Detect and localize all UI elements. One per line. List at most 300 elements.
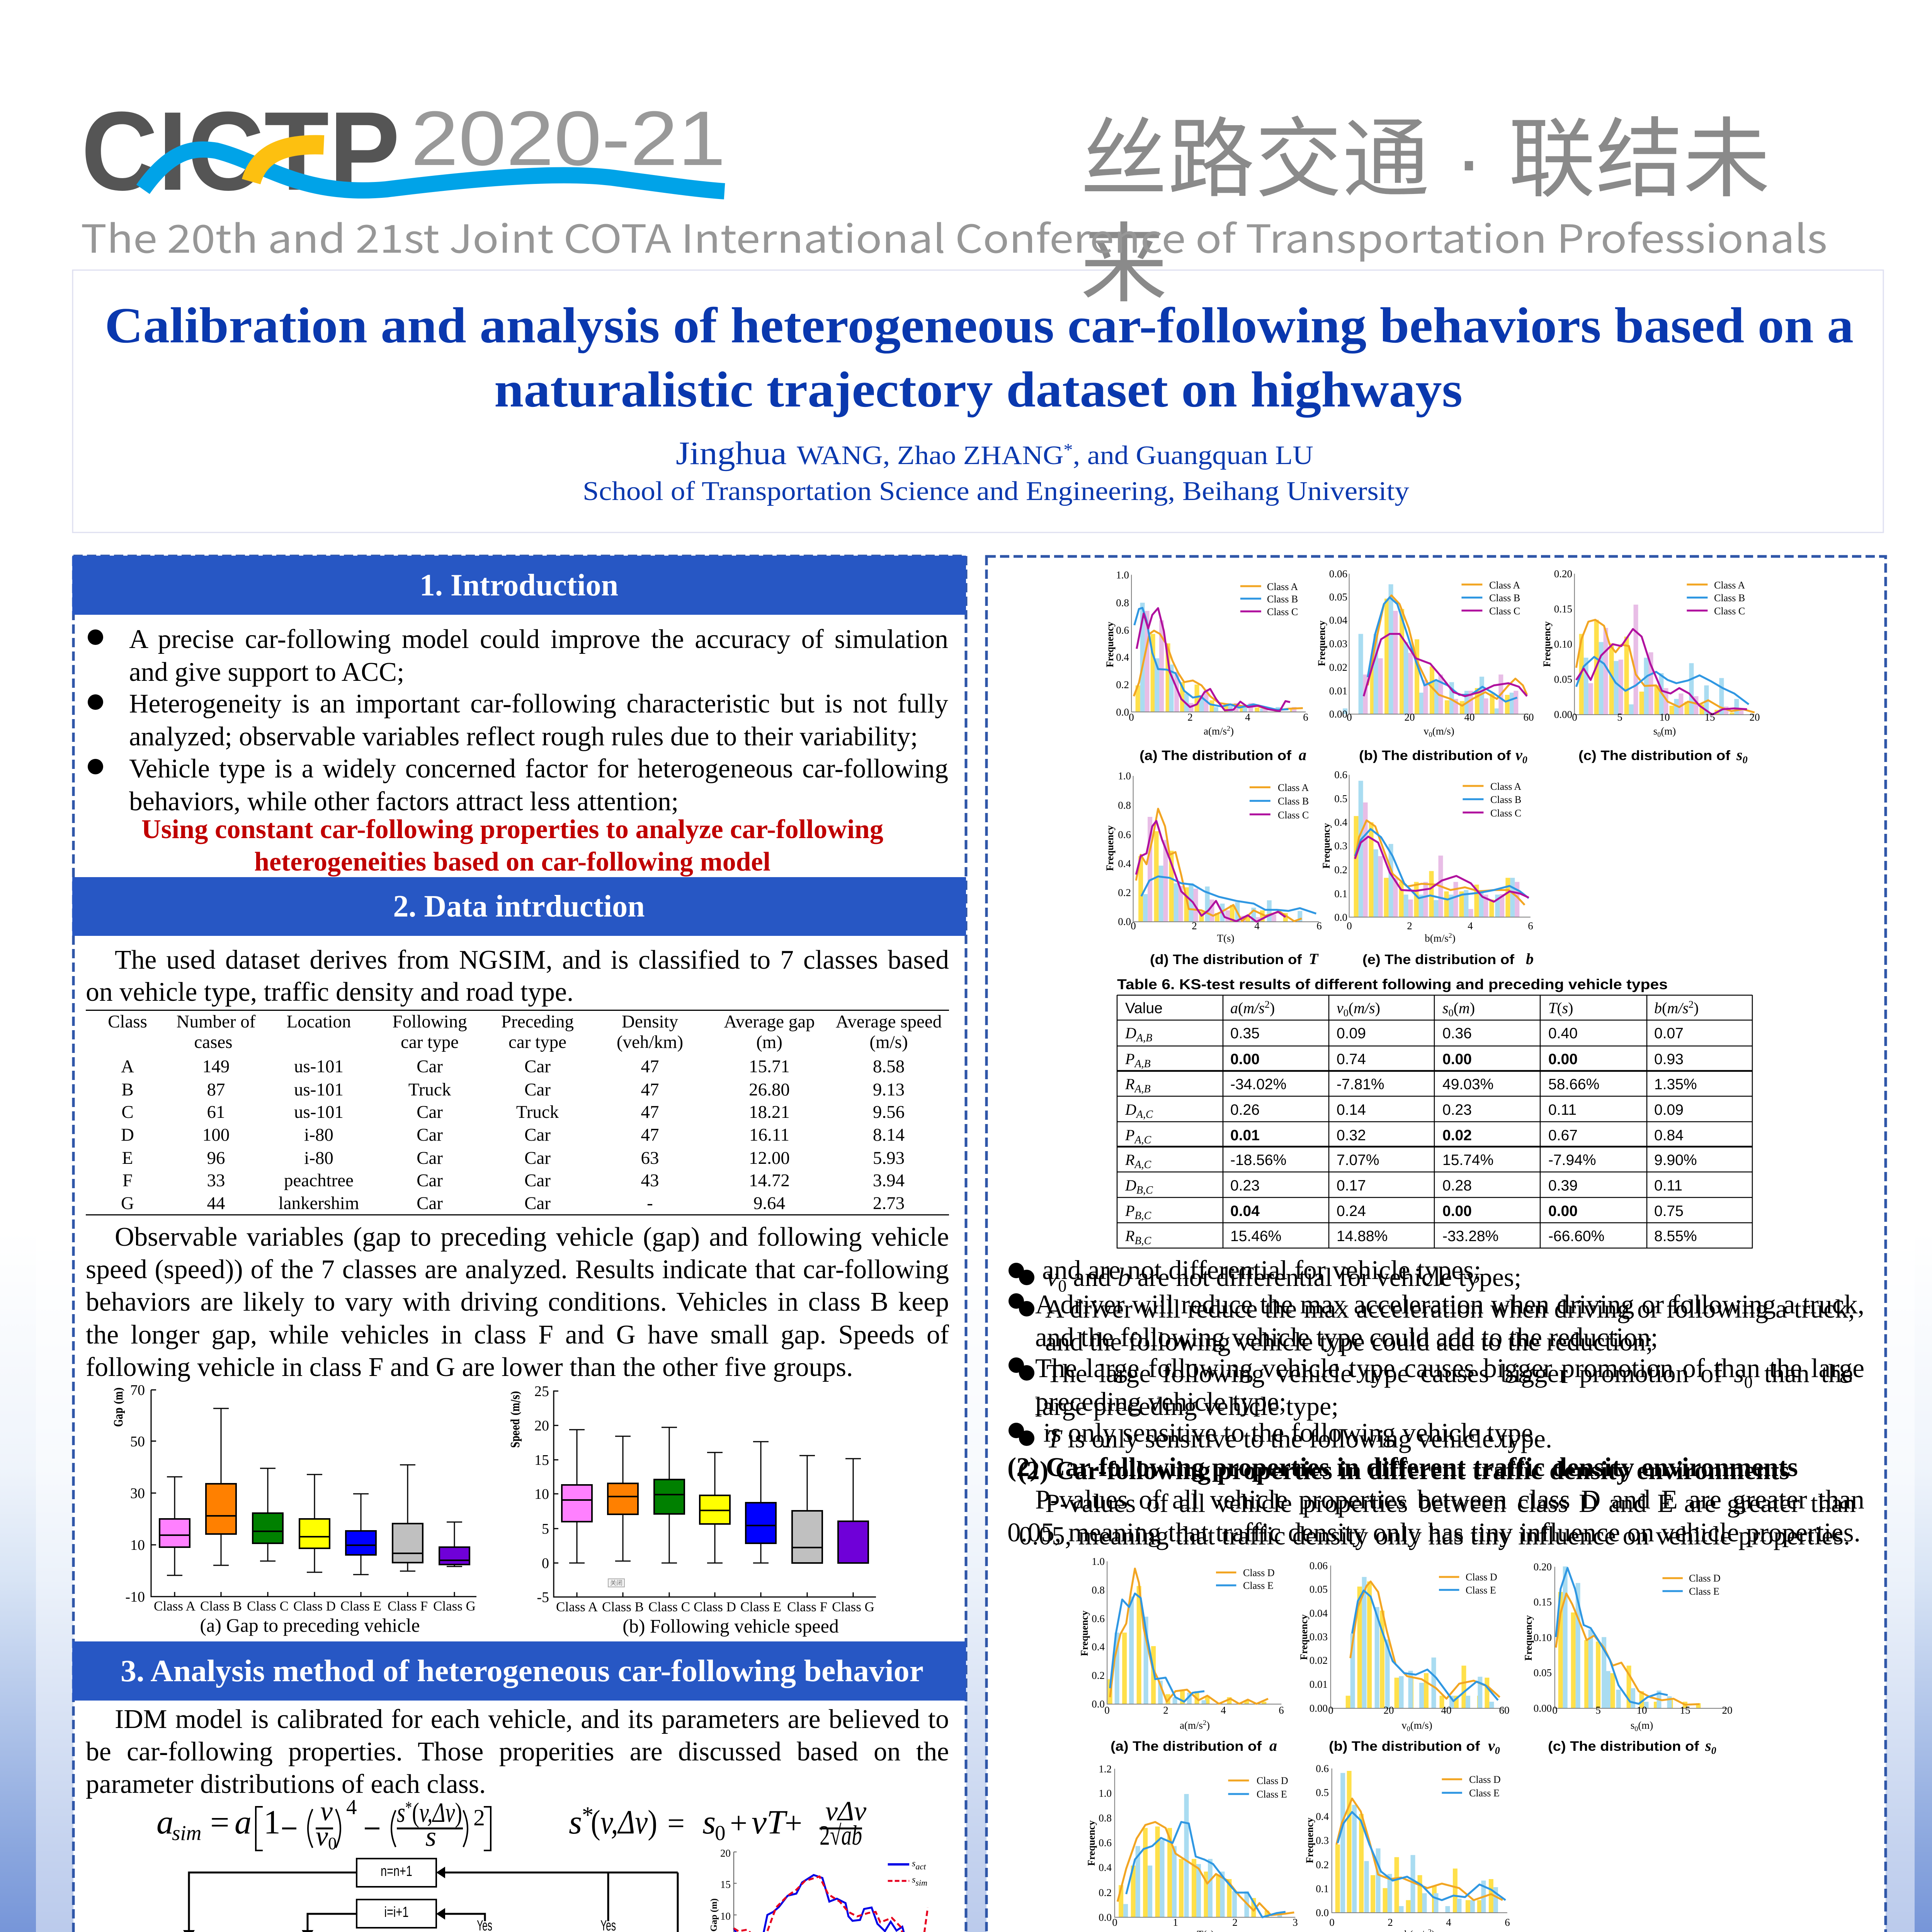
table: KS-test results: 0.17 (1337, 1177, 1366, 1194)
table: dataset classes: cases (194, 1032, 233, 1052)
text block: findings (2), doubled layers: and the following vehicle type could add to the reduction; (1035, 1323, 1658, 1352)
chart: density distribution T (classes D E): 1 (1173, 1917, 1178, 1928)
chart: density distribution v0 (classes D E): 60 (1499, 1704, 1509, 1716)
chart: density distribution s0 (classes D E): 0.20 (1534, 1561, 1552, 1573)
table: KS-test results: Value (1125, 1000, 1163, 1017)
chart: KS distribution b (classes A B C): 2 (1449, 932, 1452, 939)
chart: KS distribution v0 (classes A B C): 0.05 (1329, 591, 1347, 603)
table: dataset classes: 26.80 (749, 1080, 790, 1100)
table: KS-test results: 0.93 (1654, 1051, 1684, 1068)
chart: KS distribution b (classes A B C): 0.4 (1334, 816, 1348, 828)
chart: KS distribution b (classes A B C) (1321, 769, 1534, 968)
chart: gap box plot: Class F (388, 1599, 428, 1614)
chart: density distribution a (classes D E): 2 (1163, 1704, 1168, 1716)
chart: density distribution v0 (classes D E): v (1488, 1737, 1495, 1754)
equation: desired gap: vΔv (825, 1796, 866, 1827)
chart: KS distribution b (classes A B C): b(m/s (1425, 932, 1449, 944)
chart: KS distribution a (classes A B C): 2 (1227, 724, 1230, 732)
chart: density distribution b (classes D E): 2 (1388, 1917, 1393, 1928)
text block: findings (2), doubled layers: The large following vehicle type causes bigger promotion of s0 than the (1046, 1359, 1853, 1392)
equation: desired gap: = (667, 1806, 685, 1840)
table: dataset classes: 87 (207, 1080, 225, 1100)
chart: density distribution b (classes D E): 0.0 (1316, 1907, 1329, 1918)
table: KS-test results: 8.55% (1654, 1228, 1697, 1245)
chart: density distribution a (classes D E): 0.2 (1092, 1670, 1105, 1681)
table: dataset classes: 47 (641, 1080, 659, 1100)
chart: density distribution s0 (classes D E): 20 (1722, 1704, 1733, 1716)
chart: density distribution b (classes D E): 4 (1446, 1917, 1451, 1928)
chart: density distribution T (classes D E): Class E (1257, 1789, 1287, 1800)
chart: density distribution b (classes D E): Class D (1469, 1774, 1501, 1785)
table: dataset classes: Car (417, 1125, 443, 1145)
chart: density distribution b (classes D E): 0.4 (1316, 1811, 1329, 1822)
table: dataset classes: 9.56 (873, 1102, 905, 1122)
chart: density distribution a (classes D E): Class E (1243, 1580, 1274, 1591)
table: KS-test results: 0 (1344, 1007, 1349, 1019)
table: dataset classes: Car (524, 1193, 551, 1213)
text block: observable variables: the longer gap, while vehicles in class F and G have small gap. Speeds of (86, 1320, 949, 1350)
chart: density distribution s0 (classes D E): s (1631, 1719, 1634, 1731)
chart: speed box plot: Class D (694, 1599, 736, 1614)
equation: desired gap: 2√ab (820, 1820, 862, 1851)
table: dataset classes: 47 (641, 1056, 659, 1077)
table: dataset classes: C (121, 1102, 134, 1122)
chart: gap box plot: (a) Gap to preceding vehicle (200, 1614, 420, 1636)
table: dataset classes: 8.14 (873, 1125, 905, 1145)
table: dataset classes: 61 (207, 1102, 225, 1122)
chart: simulated gap trajectory: s (912, 1875, 915, 1885)
table: KS-test results: B,C (1134, 1210, 1151, 1222)
chart: speed box plot: 25 (534, 1383, 549, 1400)
authors (676, 435, 1313, 471)
table: KS-test results (1117, 976, 1752, 1248)
chart: density distribution T (classes D E): 1.2 (1099, 1763, 1112, 1775)
chart: KS distribution a (classes A B C): 0.6 (1116, 624, 1129, 636)
chart: density distribution v0 (classes D E): 0 (1407, 1725, 1410, 1733)
chart: KS distribution v0 (classes A B C): Class C (1489, 605, 1520, 617)
chart: density distribution s0 (classes D E): 0 (1552, 1704, 1558, 1716)
table: KS-test results: 0.14 (1337, 1102, 1366, 1118)
chart: density distribution a (classes D E): Frequency (1079, 1611, 1090, 1656)
table: dataset classes: Car (524, 1148, 551, 1168)
chart: density distribution s0 (classes D E): 0.10 (1534, 1632, 1552, 1643)
chart: KS distribution a (classes A B C): Class B (1267, 594, 1298, 605)
chart: density distribution s0 (classes D E): 0.15 (1534, 1596, 1552, 1608)
chart: gap box plot: Class B (200, 1599, 242, 1614)
chart: KS distribution T (classes A B C): Class B (1278, 796, 1309, 807)
title: Calibration and analysis of heterogeneous car-following behaviors based on a (105, 298, 1854, 354)
table: KS-test results: 0.11 (1654, 1177, 1682, 1194)
equation: IDM acceleration: s (397, 1797, 408, 1828)
chart: density distribution a (classes D E): 0 (1104, 1704, 1110, 1716)
chart: density distribution b (classes D E): Frequency (1304, 1818, 1315, 1863)
table: KS-test results: 0.24 (1337, 1203, 1366, 1219)
chart: speed box plot: 10 (534, 1486, 549, 1502)
chart: KS distribution v0 (classes A B C): Frequency (1316, 621, 1327, 666)
flowchart: analysis process: i=i+1 (384, 1904, 409, 1920)
authors: , and Guangquan LU (1073, 440, 1313, 470)
table: KS-test results: 58.66% (1548, 1076, 1599, 1093)
chart: KS distribution s0 (classes A B C): 0 (1657, 731, 1661, 738)
equation: IDM acceleration: a (235, 1804, 252, 1841)
table: dataset classes: D (121, 1125, 134, 1145)
chart: KS distribution a (classes A B C): Frequency (1104, 622, 1116, 667)
chart: KS distribution b (classes A B C): Frequency (1321, 823, 1332, 869)
chart: speed box plot: -5 (537, 1589, 549, 1605)
table: KS-test results: R (1125, 1075, 1134, 1093)
chart: density distribution s0 (classes D E): 15 (1680, 1704, 1690, 1716)
table: dataset classes: Location (286, 1012, 351, 1032)
table: dataset classes: Truck (516, 1102, 559, 1122)
chart: density distribution v0 (classes D E): 0.02 (1310, 1655, 1328, 1666)
table: dataset classes: Following (392, 1012, 467, 1032)
text block: introduction: Heterogeneity is an important car-following characteristic but is not fully (129, 689, 948, 719)
table: KS-test results: A,B (1136, 1032, 1152, 1044)
heading: conference slogan (1080, 111, 1770, 313)
chart: KS distribution T (classes A B C): Frequency (1104, 825, 1116, 871)
chart: density distribution v0 (classes D E): Class E (1466, 1585, 1496, 1596)
table: KS-test results: A,C (1134, 1159, 1151, 1171)
chart: density distribution s0 (classes D E): (c) The distribution of (1548, 1739, 1699, 1754)
chart: density distribution v0 (classes D E): 0.06 (1310, 1560, 1328, 1571)
chart: density distribution s0 (classes D E): s (1705, 1737, 1711, 1754)
chart: speed box plot: Class C (648, 1599, 690, 1614)
text block: observable variables (86, 1224, 949, 1384)
chart: density distribution T (classes D E): 0.8 (1099, 1812, 1112, 1824)
chart: density distribution v0 (classes D E): 0 (1328, 1704, 1333, 1716)
chart: KS distribution s0 (classes A B C): Class C (1714, 605, 1745, 617)
text block: method description: parameter distributions of each class. (86, 1769, 486, 1799)
chart: KS distribution s0 (classes A B C): 0.10 (1554, 638, 1572, 650)
chart: density distribution v0 (classes D E): v (1401, 1719, 1407, 1731)
table: dataset classes: 16.11 (749, 1125, 789, 1145)
equation: desired gap: vT (752, 1804, 788, 1841)
chart: KS distribution v0 (classes A B C): Class B (1489, 592, 1520, 604)
title: naturalistic trajectory dataset on highways (494, 362, 1463, 418)
table: KS-test results: 0.00 (1230, 1051, 1260, 1068)
chart: density distribution a (classes D E): a(m/s (1180, 1719, 1203, 1731)
text block: findings (2), doubled layers: T is only sensitive to the following vehicle type. (1046, 1424, 1552, 1453)
table: KS-test results: 15.46% (1230, 1228, 1281, 1245)
chart: KS distribution v0 (classes A B C): 0.06 (1329, 568, 1347, 580)
table: dataset classes: us-101 (294, 1102, 344, 1122)
text block: findings (2), doubled layers: (2) Car-following properties in different traffic density environments (1018, 1456, 1789, 1485)
text block: findings (2), doubled layers: and the following vehicle type could add to the reduction; (1045, 1327, 1653, 1356)
equation: IDM acceleration (156, 1795, 491, 1853)
flowchart connectors (138, 1872, 678, 1932)
chart: KS distribution a (classes A B C): 0 (1129, 711, 1134, 723)
chart: density distribution a (classes D E): (a) The distribution of (1111, 1739, 1262, 1754)
chart: density distribution v0 (classes D E): 0.03 (1310, 1631, 1328, 1643)
table: dataset classes: 9.13 (873, 1080, 905, 1100)
chart: KS distribution T (classes A B C): Class C (1278, 810, 1309, 821)
table: KS-test results: 0.07 (1654, 1025, 1684, 1042)
table: KS-test results: m/s) (1354, 999, 1380, 1017)
icon: intro bullets (88, 629, 103, 774)
table: dataset classes: 96 (207, 1148, 225, 1168)
table: dataset classes: Car (417, 1148, 443, 1168)
equation: desired gap: s (569, 1804, 582, 1841)
chart: density distribution T (classes D E): 0.2 (1099, 1887, 1112, 1898)
table: KS-test results: 0.67 (1548, 1127, 1578, 1144)
text block: findings (2), doubled layers: P-values of all vehicle properties between class D and E are greater than (1045, 1488, 1856, 1518)
equation: desired gap (569, 1796, 866, 1851)
chart: KS distribution v0 (classes A B C): 60 (1523, 711, 1534, 723)
chart: density distribution v0 (classes D E): 0.01 (1310, 1679, 1328, 1690)
background gradient (0, 1231, 1932, 1932)
table: dataset classes: 149 (202, 1056, 230, 1077)
chart: KS distribution s0 (classes A B C): (c) The distribution of (1578, 748, 1730, 763)
table: KS-test results: 0.09 (1654, 1102, 1684, 1118)
table: KS-test results: 15.74% (1442, 1152, 1493, 1168)
table: dataset classes: 63 (641, 1148, 659, 1168)
chart: KS distribution T (classes A B C): 4 (1254, 920, 1260, 932)
text block: findings (2), doubled layers: A driver will reduce the max acceleration when driving or following a truck, (1035, 1290, 1864, 1320)
chart: KS distribution s0 (classes A B C): (m) (1661, 725, 1676, 737)
chart: gap box plot: 10 (130, 1537, 145, 1553)
table: KS-test results: -18.56% (1230, 1152, 1286, 1168)
text block: observable variables: speed (speed)) of the 7 classes are analyzed. Results indicate that car-following (86, 1255, 949, 1284)
table: KS-test results: 0.36 (1442, 1025, 1472, 1042)
table: dataset classes: Average speed (836, 1012, 942, 1032)
equation: desired gap: 0 (715, 1821, 726, 1845)
table: dataset classes: peachtree (284, 1170, 354, 1190)
chart: KS distribution a (classes A B C): a(m/s (1204, 725, 1227, 737)
chart: KS distribution T (classes A B C): 0.4 (1118, 858, 1131, 869)
chart: simulated gap trajectory: 20 (720, 1847, 731, 1859)
authors: Jinghua (676, 435, 787, 471)
table: KS-test results: 0.35 (1230, 1025, 1260, 1042)
chart: speed box plot: Class B (602, 1599, 644, 1614)
table: KS-test results: 14.88% (1337, 1228, 1388, 1245)
chart: KS distribution b (classes A B C): (e) The distribution of (1362, 952, 1514, 967)
heading: conference slogan: 丝路交通 · 联结未 (1080, 111, 1770, 208)
table: dataset classes: 9.64 (753, 1193, 785, 1213)
table: dataset classes: 47 (641, 1102, 659, 1122)
table: dataset classes: 47 (641, 1125, 659, 1145)
chart: KS distribution b (classes A B C): 0.1 (1334, 888, 1347, 900)
chart: density distribution s0 (classes D E): (m) (1638, 1719, 1653, 1731)
chart: KS distribution a (classes A B C): Class C (1267, 606, 1298, 617)
equation: IDM acceleration: ( (412, 1797, 419, 1828)
chart: density distribution a (classes D E): 2 (1203, 1719, 1206, 1726)
chart: KS distribution b (classes A B C): 6 (1528, 920, 1533, 932)
heading: 1. Introduction (72, 556, 966, 615)
table: KS-test results: A,C (1134, 1134, 1151, 1146)
chart: KS distribution b (classes A B C): Class C (1490, 808, 1521, 819)
table: dataset classes: (m) (756, 1032, 782, 1052)
chart: density distribution v0 (classes D E): 0.05 (1310, 1583, 1328, 1595)
text block: method description: be car-following properties. Those properities are discussed based on the (86, 1737, 949, 1767)
table: KS-test results: R (1125, 1151, 1134, 1168)
chart: density distribution a (classes D E): a (1269, 1737, 1277, 1754)
equation: IDM acceleration: v,Δv) (419, 1797, 465, 1828)
text block: findings (2), doubled layers: and are not differential for vehicle types; (1042, 1255, 1481, 1285)
text block: findings (2), doubled layers: 0.05, meaning that traffic density only has tiny influence on vehicle properties. (1007, 1518, 1861, 1548)
chart: KS distribution v0 (classes A B C): Class A (1489, 580, 1520, 591)
chart: density distribution v0 (classes D E): 40 (1441, 1704, 1451, 1716)
table: KS-test results: 0.40 (1548, 1025, 1578, 1042)
chart: KS distribution b (classes A B C): ) (1452, 932, 1456, 944)
text block: dataset description (86, 947, 949, 1005)
equation: IDM acceleration: sim (172, 1821, 201, 1845)
chart: speed box plot: Class A (556, 1599, 598, 1614)
table: KS-test results: 9.90% (1654, 1152, 1697, 1168)
table: dataset classes: E (122, 1148, 133, 1168)
equation: desired gap: s (702, 1804, 716, 1841)
table: KS-test results: 0.84 (1654, 1127, 1684, 1144)
chart: density distribution T (classes D E): Frequency (1086, 1820, 1097, 1866)
heading: conference name: The 20th and 21st Joint COTA International Conference of Transportation Professionals (81, 208, 1827, 264)
chart: density distribution T (classes D E): 1.0 (1099, 1787, 1112, 1799)
heading: 3. Analysis method: 3. Analysis method of heterogeneous car-following behavior (121, 1654, 923, 1688)
equation: IDM acceleration: v (320, 1796, 333, 1827)
table: KS-test results: m) (1459, 999, 1475, 1017)
chart: density distribution v0 (classes D E): (b) The distribution of (1329, 1739, 1480, 1754)
table: dataset classes: car type (509, 1032, 566, 1052)
chart: KS distribution a (classes A B C): 0.4 (1116, 651, 1129, 663)
chart: gap box plot: 50 (130, 1434, 145, 1450)
chart: KS distribution v0 (classes A B C): (m/s) (1432, 725, 1454, 737)
chart: KS distribution v0 (classes A B C): (b) The distribution of (1359, 748, 1511, 763)
chart: gap box plot: Class D (293, 1599, 336, 1614)
equation: IDM acceleration: s (425, 1821, 436, 1852)
chart: density distribution T (classes D E) (1086, 1763, 1298, 1932)
chart: KS distribution a (classes A B C) (1104, 569, 1308, 764)
chart: KS distribution v0 (classes A B C) (1316, 568, 1534, 765)
heading: 2. Data intrduction: 2. Data intrduction (393, 889, 645, 923)
chart: KS distribution T (classes A B C): Class A (1278, 782, 1309, 793)
chart: speed box plot: Class G (832, 1599, 874, 1614)
chart: KS distribution s0 (classes A B C): 20 (1750, 711, 1760, 723)
chart: KS distribution v0 (classes A B C): 0.02 (1329, 662, 1347, 673)
table: KS-test results: D (1125, 1177, 1136, 1194)
table: KS-test results: a(m/s (1230, 999, 1265, 1017)
table: dataset classes: Car (524, 1125, 551, 1145)
chart: density distribution b (classes D E): 6 (1505, 1917, 1510, 1928)
text block: findings (2), doubled layers: v0 and b are not differential for vehicle types; (1046, 1262, 1521, 1296)
chart: gap box plot: Gap (m) (112, 1387, 126, 1427)
chart: speed box plot: (b) Following vehicle speed (622, 1615, 839, 1637)
table: KS-test results: D (1125, 1024, 1136, 1042)
chart: density distribution a (classes D E): Class D (1243, 1567, 1275, 1578)
table: KS-test results: 2 (1689, 999, 1694, 1010)
chart: gap box plot: Class G (433, 1599, 476, 1614)
chart: simulated gap trajectory (709, 1847, 937, 1932)
text block: findings (2), doubled layers: 0.05, meaning that traffic density only has tiny influence on vehicle properties. (1019, 1521, 1850, 1550)
chart: KS distribution s0 (classes A B C): 0 (1743, 754, 1748, 765)
chart: KS distribution v0 (classes A B C): 0.04 (1329, 614, 1348, 626)
table: dataset classes: G (121, 1193, 134, 1213)
chart: simulated gap trajectory: act (915, 1862, 926, 1871)
table: KS-test results: 0.01 (1230, 1127, 1260, 1144)
chart: speed box plot: Class E (740, 1599, 781, 1614)
affiliation: School of Transportation Science and Engineering, Beihang University (583, 476, 1409, 506)
table: KS-test results: 0.39 (1548, 1177, 1578, 1194)
text block: introduction: A precise car-following model could improve the accuracy of simulation (129, 624, 948, 654)
chart: KS distribution T (classes A B C): 1.0 (1118, 770, 1131, 782)
table: dataset classes: 12.00 (749, 1148, 790, 1168)
chart: density distribution v0 (classes D E): Frequency (1298, 1614, 1310, 1660)
table: dataset classes: Number of (177, 1012, 256, 1032)
chart: simulated gap trajectory: s (912, 1859, 915, 1869)
chart: KS distribution v0 (classes A B C): 0 (1429, 731, 1432, 738)
chart: density distribution b (classes D E): 0.6 (1316, 1763, 1329, 1774)
chart: KS distribution T (classes A B C): 6 (1316, 920, 1322, 932)
table: dataset classes: Car (417, 1056, 443, 1077)
equation: desired gap: + (785, 1806, 802, 1840)
table: KS-test results: ( (1349, 999, 1354, 1017)
equation: IDM acceleration: 1 (264, 1804, 281, 1841)
chart: density distribution a (classes D E) (1079, 1556, 1284, 1754)
text block: introduction: analyzed; observable variables reflect rough rules due to their variability; (129, 722, 918, 752)
chart: KS distribution s0 (classes A B C): Class B (1714, 592, 1745, 604)
text block: dataset description: The used dataset derives from NGSIM, and is classified to 7 classes based (115, 945, 949, 975)
table: KS-test results: 49.03% (1442, 1076, 1493, 1093)
heading: 2. Data intrduction (72, 877, 966, 936)
chart: KS distribution s0 (classes A B C): 0.05 (1554, 673, 1572, 685)
table: KS-test results: A,C (1136, 1109, 1153, 1121)
chart: KS distribution v0 (classes A B C): v (1515, 746, 1522, 764)
chart: KS distribution T (classes A B C): T (1309, 950, 1319, 968)
chart: speed box plot: 15 (534, 1452, 549, 1468)
text block: dataset description: on vehicle type, traffic density and road type. (86, 977, 573, 1007)
text block: observable variables: behaviors are likely to vary with driving conditions. Vehicles in class B keep (86, 1287, 949, 1317)
chart: density distribution T (classes D E): 0.4 (1099, 1862, 1112, 1873)
chart: speed box plot (509, 1383, 876, 1637)
chart: KS distribution a (classes A B C): 6 (1303, 711, 1308, 723)
text block: findings (2), doubled layers: (2) Car-following properties in different traffic density environments (1007, 1452, 1798, 1482)
table: KS-test results: -7.81% (1337, 1076, 1384, 1093)
chart: KS distribution T (classes A B C) (1104, 770, 1322, 968)
table: dataset classes: Preceding (501, 1012, 574, 1032)
translucent backing band (36, 1231, 1915, 1932)
flowchart boxes (82, 1859, 667, 1932)
authors: WANG, Zhao ZHANG (797, 440, 1045, 470)
chart: density distribution T (classes D E): Class D (1257, 1775, 1288, 1786)
table: KS-test results: P (1125, 1126, 1134, 1144)
equation: IDM acceleration: 4 (346, 1795, 357, 1819)
table: KS-test results: -34.02% (1230, 1076, 1286, 1093)
chart: density distribution v0 (classes D E): Class D (1466, 1571, 1497, 1583)
table: KS-test results: A,B (1134, 1058, 1151, 1070)
table: dataset classes: 8.58 (873, 1056, 905, 1077)
table: dataset classes: 15.71 (749, 1056, 790, 1077)
chart: KS distribution a (classes A B C): ) (1230, 725, 1234, 737)
chart: KS distribution b (classes A B C): Class B (1490, 794, 1521, 805)
chart: gap box plot: -10 (125, 1589, 145, 1605)
chart: KS distribution v0 (classes A B C): 20 (1404, 711, 1415, 723)
table: KS-test results: 0.00 (1548, 1203, 1578, 1219)
heading: 3. Analysis method (72, 1641, 966, 1701)
icon: doubled finding bullets (1009, 1263, 1034, 1932)
equation: desired gap: (v,Δv) (591, 1804, 657, 1841)
callout: research aim: Using constant car-following properties to analyze car-following (141, 815, 883, 844)
table: dataset classes: Density (622, 1012, 679, 1032)
chart: KS distribution b (classes A B C): 0.5 (1334, 793, 1347, 804)
chart: density distribution T (classes D E): 2 (1232, 1917, 1238, 1928)
chart: density distribution s0 (classes D E): 10 (1637, 1704, 1647, 1716)
chart: density distribution b (classes D E) (1304, 1763, 1510, 1932)
chart: density distribution s0 (classes D E): 0 (1634, 1725, 1638, 1733)
table: KS-test results: -66.60% (1548, 1228, 1604, 1245)
table: dataset classes: 5.93 (873, 1148, 905, 1168)
chart: KS distribution T (classes A B C): 0.0 (1118, 916, 1131, 927)
table: KS-test results: A,B (1134, 1083, 1151, 1095)
text block: introduction: and give support to ACC; (129, 657, 404, 687)
table: KS-test results: 0 (1449, 1007, 1454, 1019)
chart: KS distribution s0 (classes A B C): s (1653, 725, 1657, 737)
